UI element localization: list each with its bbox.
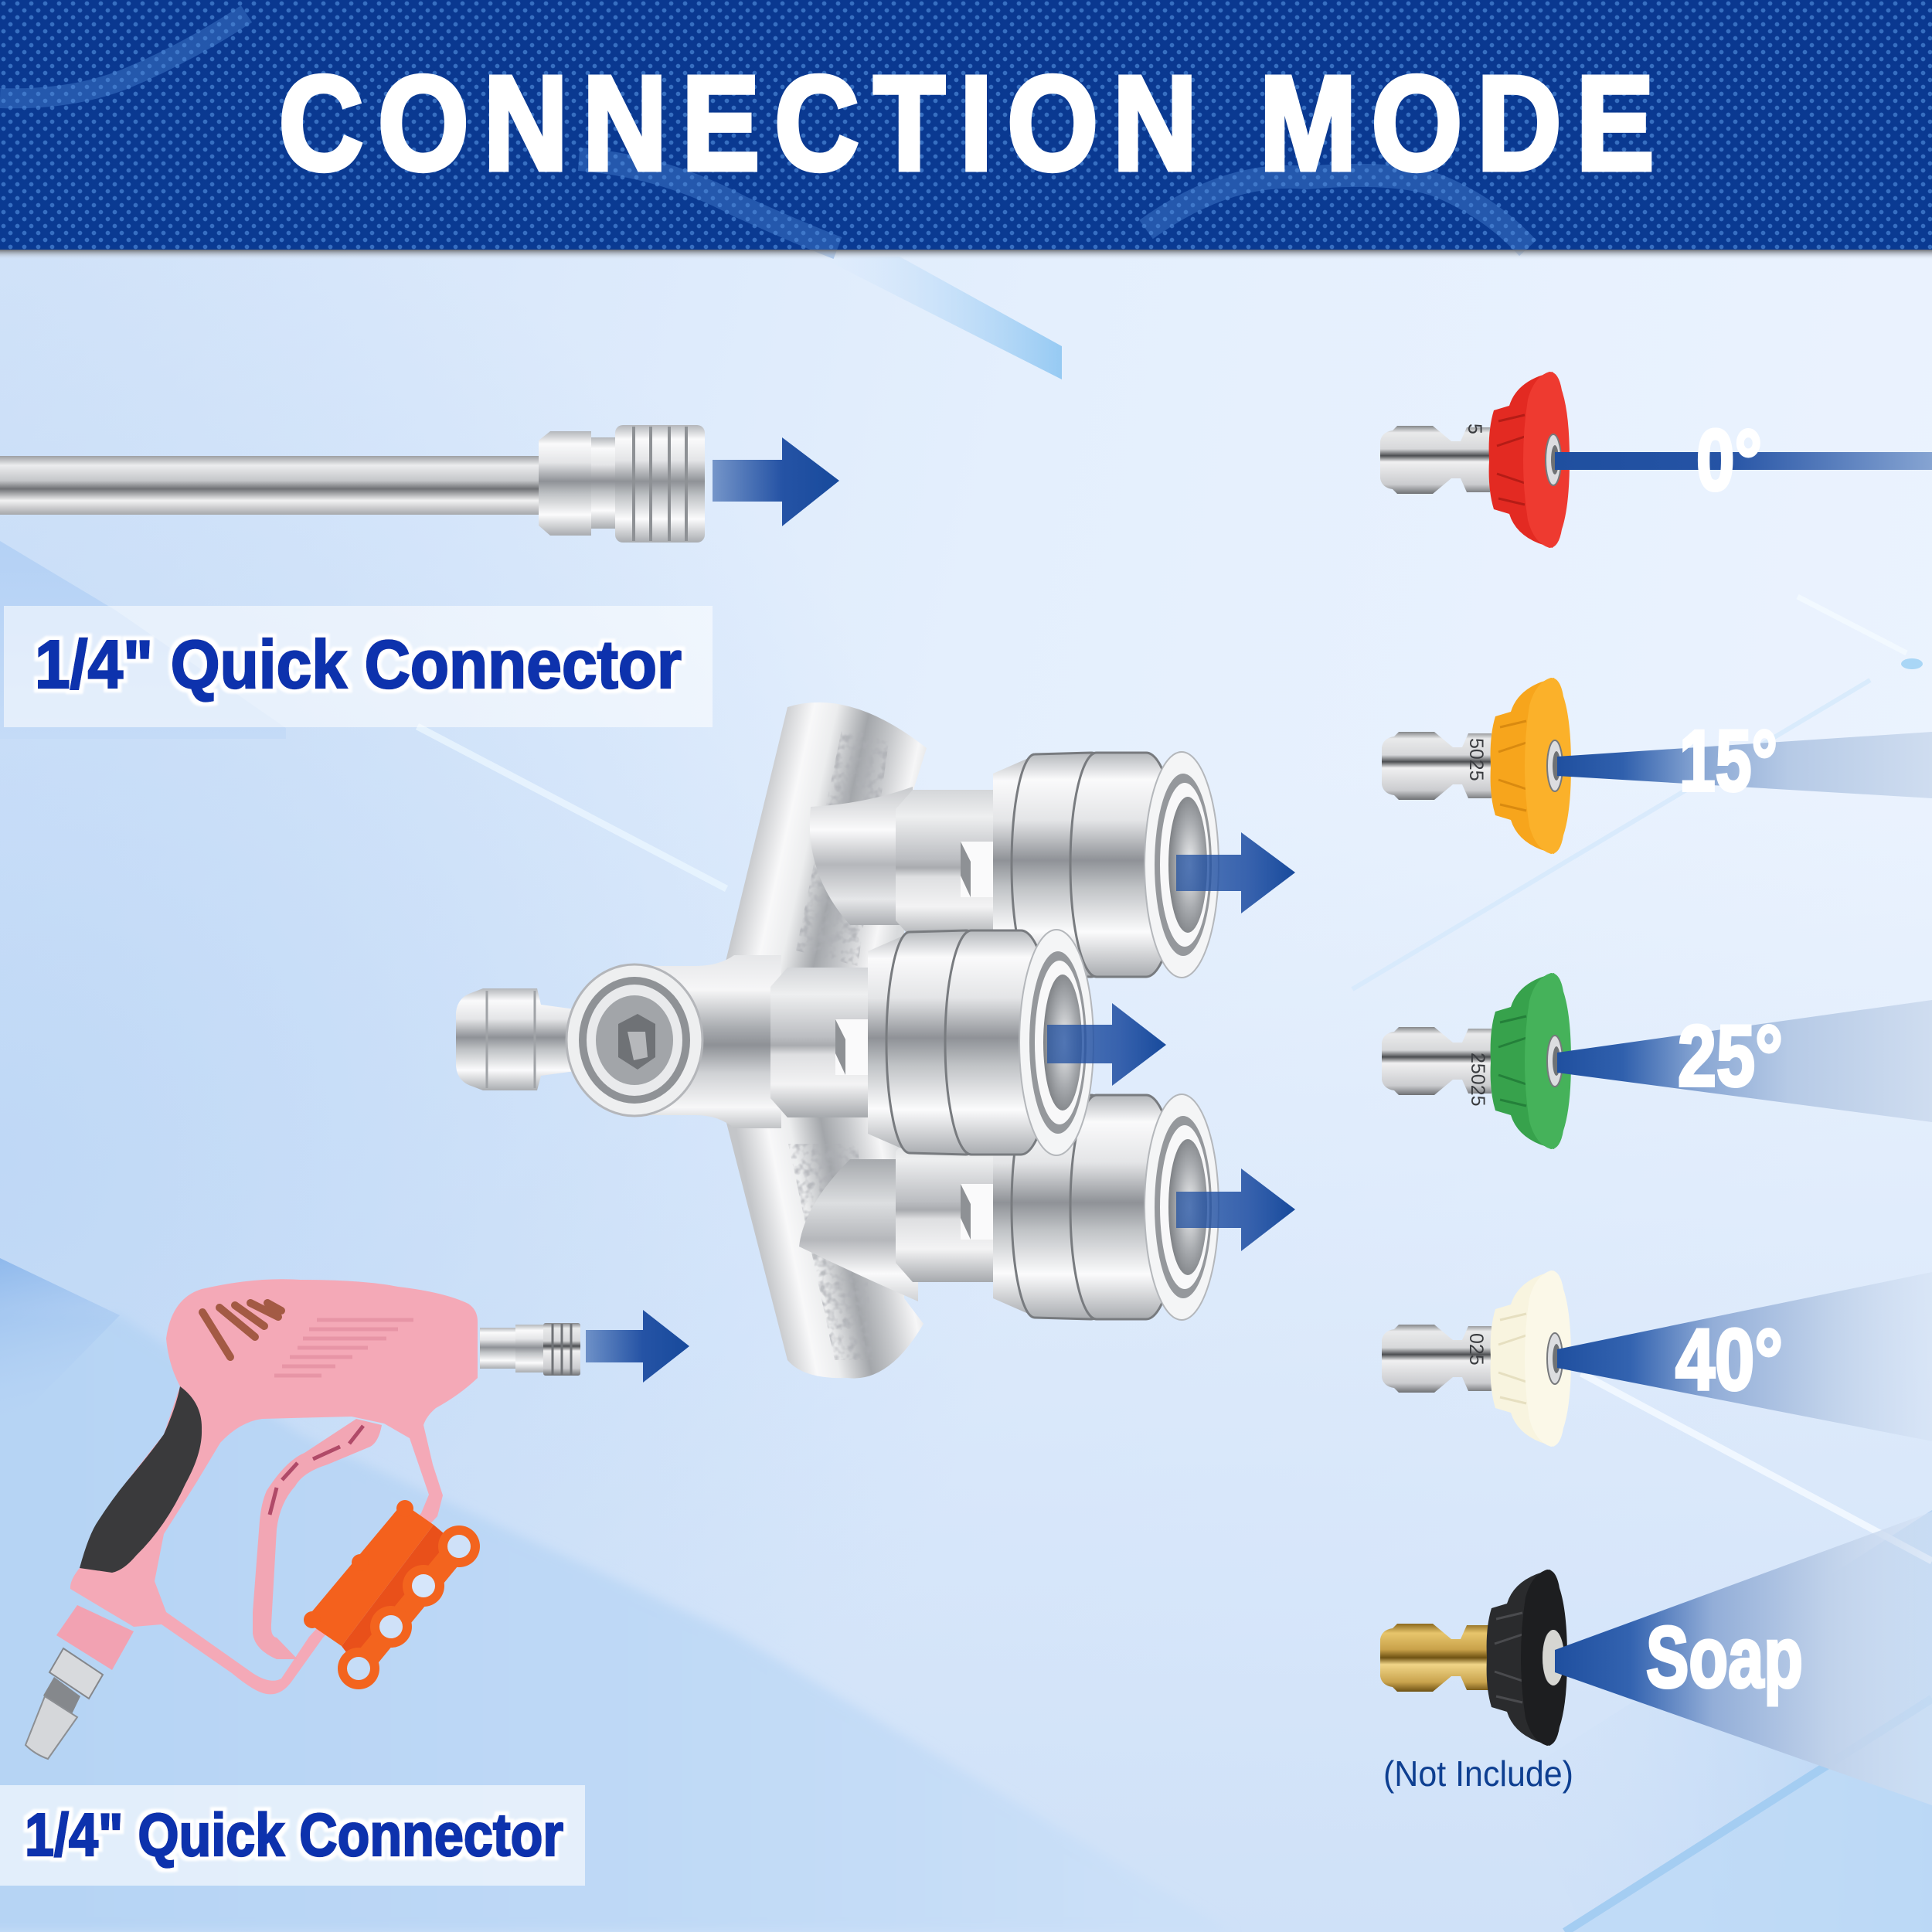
orange clip — [304, 1500, 480, 1689]
spray gun — [26, 1279, 580, 1759]
upper branch — [810, 787, 913, 925]
wand rod with quick connector — [0, 425, 705, 543]
spray: soap — [1555, 1512, 1932, 1805]
manifold with three couplers — [456, 702, 1219, 1379]
arrow: top coupler output — [1176, 832, 1295, 913]
top coupler — [896, 752, 1219, 978]
label: 15 degree: 15° — [1679, 713, 1777, 809]
label: 25 degree: 25° — [1678, 1008, 1783, 1104]
pink nut — [56, 1605, 134, 1670]
trigger stripes — [270, 1426, 363, 1515]
trigger — [253, 1419, 382, 1659]
lower branch — [799, 1159, 918, 1301]
warning text plate — [274, 1320, 413, 1376]
nozzle: green 25 degree: 25025 — [1467, 1053, 1488, 1107]
label: 40 degree: 40° — [1675, 1311, 1783, 1408]
middle coupler — [770, 930, 1094, 1155]
black grip — [80, 1386, 202, 1573]
note: not included: (Not Include) — [1383, 1753, 1573, 1794]
side port with hex socket — [566, 964, 702, 1116]
manifold lower pipe — [719, 1039, 923, 1379]
label: wand quick connector: 1/4" Quick Connector — [35, 626, 682, 702]
arrow: wand to manifold — [713, 437, 839, 526]
lower pipe texture — [788, 1144, 873, 1360]
nozzle: white 40 degree: 025 — [1465, 1333, 1487, 1366]
arrow: middle coupler output — [1047, 1003, 1166, 1086]
nozzle: red 0 degree — [1380, 372, 1570, 548]
gun body — [70, 1279, 478, 1694]
vent slots — [202, 1303, 281, 1357]
upper pipe texture — [796, 726, 889, 966]
label: wand quick connector — [4, 606, 713, 727]
label: 0 degree: 0° — [1696, 412, 1762, 509]
arrow: bottom coupler output — [1176, 1168, 1295, 1251]
spray: 15 degree — [1557, 732, 1932, 798]
label: gun quick connector: 1/4" Quick Connector — [25, 1801, 563, 1869]
spray: 25 degree — [1557, 1000, 1932, 1122]
manifold upper pipe — [719, 702, 927, 1039]
label: gun quick connector — [0, 1785, 585, 1886]
spray: 0 degree — [1555, 452, 1932, 470]
nozzle: black soap — [1380, 1570, 1567, 1746]
nozzle: orange 15 degree — [1382, 678, 1571, 854]
nozzle: green 25 degree — [1382, 973, 1571, 1149]
nozzle: orange 15 degree: 5025 — [1465, 738, 1487, 781]
nozzle: white 40 degree — [1382, 1270, 1571, 1447]
gun coupler — [480, 1323, 580, 1376]
spray: 40 degree — [1557, 1272, 1932, 1441]
nozzle: red 0 degree: 5 — [1464, 423, 1485, 434]
title: CONNECTION MODE — [279, 49, 1654, 198]
arrow: gun to manifold — [586, 1310, 689, 1383]
bottom coupler — [896, 1094, 1219, 1320]
header banner — [0, 0, 1932, 260]
label: soap: Soap — [1646, 1609, 1803, 1706]
steel inlet plug — [26, 1648, 103, 1759]
inlet plug — [456, 988, 575, 1090]
side body — [634, 955, 781, 1128]
